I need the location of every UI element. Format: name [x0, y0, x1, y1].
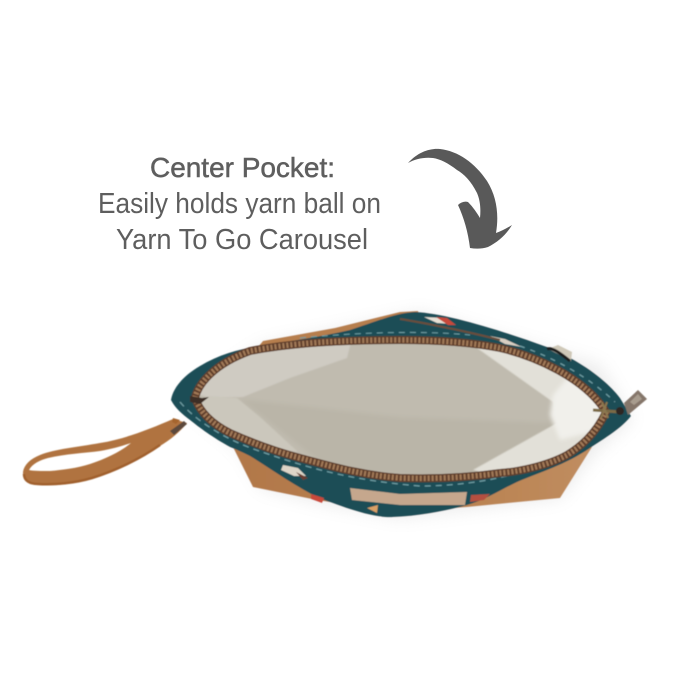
- heading: center pocket: Center Pocket:: [150, 152, 335, 183]
- teal fabric body: [171, 312, 631, 517]
- leather brand label: [350, 488, 467, 505]
- zipper tape: [195, 340, 606, 478]
- zipper teeth: [195, 340, 606, 478]
- fabric pattern accents: [180, 317, 615, 513]
- soft shadow: [180, 312, 632, 518]
- leather base bottom: [233, 447, 592, 512]
- lining right light: [474, 348, 588, 472]
- zipper pouch photo: [23, 311, 647, 518]
- lining lower left light: [202, 398, 296, 451]
- leather base top: [258, 311, 420, 350]
- zipper fold at left end: [190, 396, 209, 404]
- leather wrist strap: [23, 418, 187, 485]
- infographic canvas: [22, 148, 648, 518]
- text line: yarn to go carousel: Yarn To Go Carousel: [116, 224, 368, 256]
- lining tip highlight: [548, 380, 602, 440]
- pocket lining: [198, 343, 602, 476]
- lining upper left light: [200, 344, 350, 398]
- lining base panel: [240, 399, 557, 480]
- arrow pointing to pocket: [408, 149, 512, 249]
- side tab: [547, 345, 572, 361]
- text line: easily holds yarn ball on: Easily holds yarn ball on: [98, 188, 381, 220]
- zipper pull: [593, 390, 647, 418]
- callout text: [98, 152, 381, 256]
